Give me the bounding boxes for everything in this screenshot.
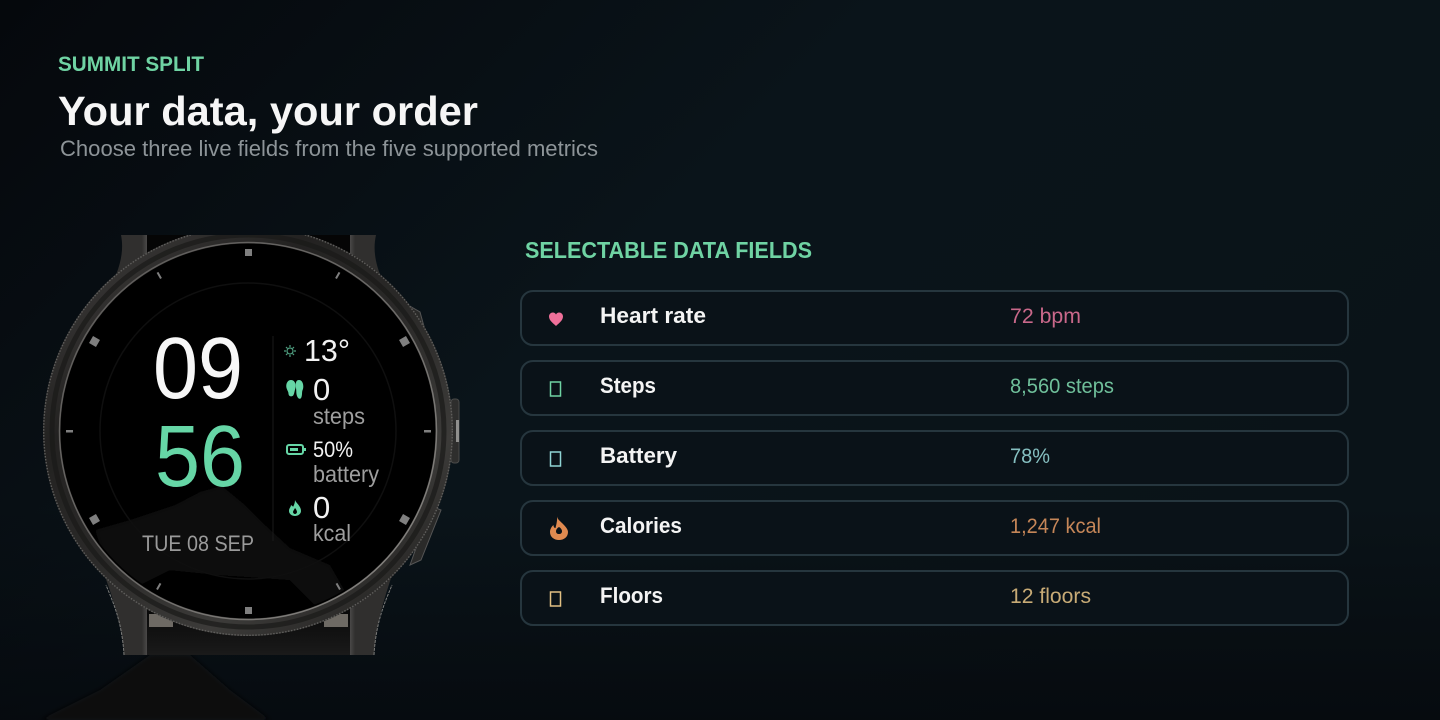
value: 72 bpm <box>1010 305 1081 328</box>
background mountain silhouette <box>40 655 270 720</box>
label: Floors <box>600 583 663 608</box>
calories label: kcal <box>313 520 351 546</box>
date: TUE 08 SEP <box>142 531 254 556</box>
row: calories <box>521 501 1348 555</box>
icon: weather sun <box>284 345 296 357</box>
icon: battery missing glyph <box>550 452 560 466</box>
screen mountain backdrop <box>96 487 344 604</box>
bezel <box>43 226 453 636</box>
icon: heart <box>549 312 563 326</box>
value: 8,560 steps <box>1010 375 1114 398</box>
subtitle: Choose three live fields from the five supported metrics <box>60 136 598 161</box>
steps value: 0 <box>313 372 330 407</box>
row: steps <box>521 361 1348 415</box>
temperature: 13° <box>304 333 350 368</box>
watch screen <box>60 244 436 618</box>
label: Heart rate <box>600 303 706 328</box>
calories value: 0 <box>313 490 330 525</box>
label: Steps <box>600 373 656 398</box>
watch illustration <box>43 226 459 655</box>
row: floors <box>521 571 1348 625</box>
label: Battery <box>600 443 678 468</box>
side crown and buttons <box>408 305 459 565</box>
battery label: battery <box>313 461 379 487</box>
icon: battery <box>287 445 306 454</box>
icon: floors missing glyph <box>550 592 560 606</box>
watch lugs <box>90 235 406 655</box>
value: 12 floors <box>1010 585 1091 608</box>
lug spring bars <box>149 614 348 627</box>
icon: steps missing glyph <box>550 382 560 396</box>
watch strap <box>147 235 350 655</box>
value: 78% <box>1010 445 1050 468</box>
value: 1,247 kcal <box>1010 515 1101 538</box>
label: Calories <box>600 513 682 538</box>
eyebrow label: SUMMIT SPLIT <box>58 53 204 76</box>
row: battery <box>521 431 1348 485</box>
divider <box>272 336 274 541</box>
hour digits: 09 <box>153 320 243 417</box>
minute digits: 56 <box>155 408 245 505</box>
title: Your data, your order <box>58 88 478 134</box>
battery value: 50% <box>313 437 353 462</box>
icon: flame <box>289 500 301 516</box>
row: heart rate <box>521 291 1348 345</box>
section heading: SELECTABLE DATA FIELDS <box>525 237 812 263</box>
icon: footprints <box>286 380 303 399</box>
icon: flame <box>550 515 568 540</box>
steps label: steps <box>313 403 365 429</box>
hour ticks <box>66 249 431 614</box>
inner arc ring <box>100 283 396 579</box>
